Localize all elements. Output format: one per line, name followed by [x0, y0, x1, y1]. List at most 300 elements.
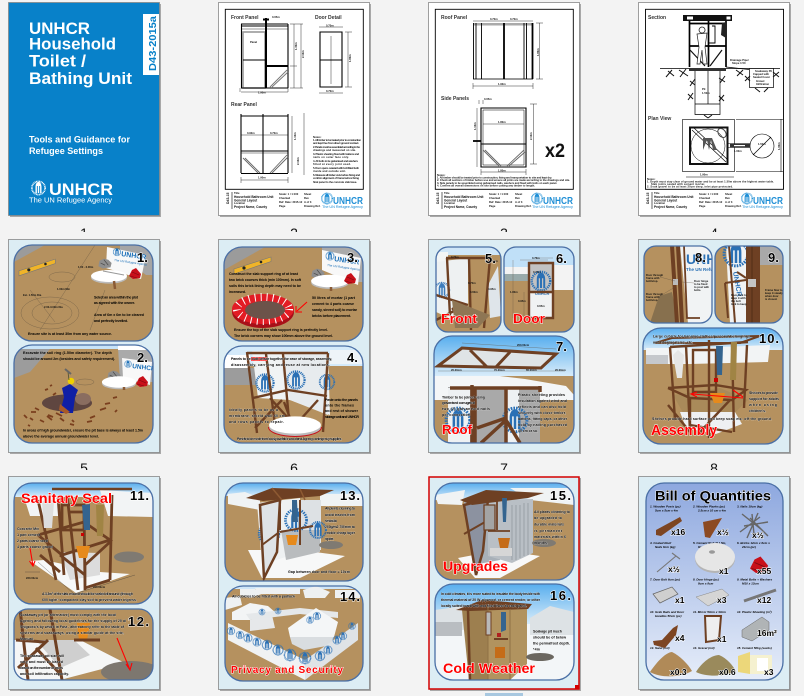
title block: Sheet: [304, 192, 311, 196]
drawing notes: 3. Plastic sheeting fixed with battens and: [313, 152, 359, 156]
icon: gravel pile: [696, 655, 736, 676]
quantities: x½: [717, 527, 729, 537]
panel: step 8 hinge: [643, 245, 713, 324]
panel: step 8 hinge: to be fixed: [694, 282, 708, 286]
title block: Drawing Ref.: [725, 204, 742, 208]
panel: step 8 hinge: frame with: [646, 276, 660, 280]
small UNHCR logo: [742, 193, 784, 209]
panel: step 11 sanitary seal: 600 kg/m³ compacted clay soil to prevent water ingress.: [42, 598, 137, 602]
step number: 4.: [347, 350, 358, 365]
drawing notes: fitted at every joint used.: [313, 162, 351, 166]
panel: step 4 wall panels: Paste onto the panels: [325, 398, 358, 402]
title block: Location: [654, 201, 666, 205]
page 2: front, door and rear panel drawings: [218, 2, 371, 217]
drawing notes: drawings and measured on site.: [313, 148, 356, 152]
panel: step 7 roof: reflects and can also hold: [518, 405, 566, 409]
panel: step 8 hinge: bolts.: [694, 288, 701, 292]
quantities: x0.3: [670, 667, 687, 677]
drawing: section: Soakaway Pit: [755, 69, 772, 73]
item labels: Handles 50cm (pc): [655, 614, 682, 618]
panel: step 6 door: 1.80m: [510, 290, 518, 294]
drawing: roof panel: 0.70m: [490, 17, 498, 21]
panel: step 3 slab support ring: [224, 247, 363, 341]
drawing: rear panel: 1.90m: [258, 176, 266, 180]
quantities: x1: [675, 595, 685, 605]
document code tab: [143, 14, 159, 75]
title block: Rev: [304, 196, 309, 200]
page number 5: 5: [80, 460, 88, 476]
cover title: Household: [29, 36, 116, 54]
item labels: 7. Door Bolt 6cm (pc): [650, 578, 680, 582]
drawing: rear panel: Rear Panel: [231, 102, 257, 108]
title block: Project Name, County: [444, 205, 477, 209]
step number: 16.: [550, 588, 571, 603]
panel: step 9 door bolt: [715, 242, 783, 323]
UNHCR logo: UNHCR: [49, 180, 113, 199]
panel: step 5 front frame: 1.90m: [490, 259, 498, 263]
panel: step 13 plastic sheeting: enable cheap layer: [325, 531, 356, 535]
panel: step 11 sanitary seal: 1 part cement: [17, 533, 41, 537]
item labels: [649, 504, 773, 650]
panel: step 3 slab support ring: 50 litres of mortar (1 part: [312, 296, 356, 300]
label: front: Front: [441, 311, 478, 326]
panel: step 12 soak pit: Agency and following local guidelines for the supply of 20 al: [20, 619, 126, 623]
small UNHCR logo: The UN Refugee Agency: [532, 204, 573, 209]
drawing: side panels: 0.05m: [484, 97, 492, 101]
panel: step 8 hinge: to post with: [694, 285, 709, 289]
panel: step 4 wall panels: membrane, shield wall 60 cm: [229, 414, 285, 418]
drawing notes: [313, 135, 361, 184]
title block: Checked: [699, 196, 711, 200]
step number: 5.: [485, 251, 496, 266]
panel: step 11 sanitary seal: [14, 483, 153, 604]
title block: Rev: [725, 196, 730, 200]
drawing: section: Section: [648, 15, 666, 21]
panel: step 9 door bolt: when door: [764, 294, 779, 298]
panel: step 4 wall panels: storage unit and UNHCR: [325, 415, 359, 419]
quantities: x1: [719, 566, 729, 576]
panel: step 5 front frame: [435, 247, 501, 332]
panel: step 11 sanitary seal: A 3-3m² of the slab, mound should be sealed all around, (through: [42, 592, 133, 596]
icon: sand pile: [650, 652, 692, 676]
small UNHCR logo: UNHCR: [753, 196, 784, 207]
panel: step 7 roof: hold by nailing purchased: [518, 423, 567, 427]
small UNHCR logo: UNHCR: [333, 196, 364, 207]
UNHCR logo: The UN Refugee Agency: [29, 196, 112, 204]
panel: step 1 site selection: and perfectly levelled.: [94, 319, 128, 323]
page 8: steps 8, 9 and 10: [638, 240, 791, 454]
panel: step 5 front frame: 0.70m: [451, 255, 459, 259]
title block: Ref: Date: 2015-12: [489, 200, 513, 204]
panel: step 11 sanitary seal: 220.00cm: [93, 585, 106, 589]
panel: step 2 excavation: should be around 2m (besides and safety requirement).: [23, 357, 115, 361]
drawing notes: Notes:: [647, 177, 655, 181]
panel: step 7 roof: insulation against wind and: [518, 399, 567, 403]
drawing: door detail: 0.70m: [326, 24, 334, 28]
drawing: door detail: 0.70m: [326, 89, 334, 93]
page 10: steps 13 and 14: [218, 476, 371, 691]
drawing: rear panel: 1.10m: [293, 132, 297, 140]
panel: step 3 slab support ring: The brick corners may show 100mm above the ground level.: [234, 334, 333, 338]
icon: cement bags: [738, 652, 772, 674]
panel: step 13 plastic sheeting: 200g/m2 750mm to: [325, 525, 356, 529]
drawing: section: Capped with: [753, 72, 769, 76]
panel: step 9 door bolt: lock to keep: [731, 302, 747, 306]
panel: step 13 plastic sheeting: [225, 483, 363, 581]
panel: step 15 upgrades: be upgraded to: [534, 516, 563, 520]
panel: step 1 site selection: The UN Refugee Agency: [114, 258, 148, 267]
drawing: rear panel: 0.90m: [247, 131, 255, 135]
drawing notes: confirm alignment of frame before fixing: [313, 176, 359, 180]
page number 6: 6: [290, 460, 298, 476]
title block: Household Bathroom Unit: [444, 195, 484, 199]
panel: step 6 door: 0.95m: [518, 299, 526, 303]
page number 4: 4: [710, 225, 718, 241]
panel: step 1 site selection: Area of 6m x 6m to be cleared: [94, 313, 144, 317]
drawing: roof panel: 0.70m: [510, 17, 518, 21]
title block: Rev: [515, 196, 520, 200]
panel: step 10 assembly: Shelves provide hard surface and keep soap etc. off the ground.: [652, 417, 772, 421]
title block: Checked: [279, 196, 291, 200]
title block: Scale: 1 / 1:100: [279, 192, 299, 196]
panel: step 13 plastic sheeting: avoid insects from: [325, 513, 355, 517]
small UNHCR logo: [322, 193, 364, 209]
panel: step 12 soak pit: systems and soakaways, using a similar guide at the site.: [20, 631, 124, 635]
document code tab: D43-2015a: [147, 16, 159, 71]
panel: step 3 slab support ring: UNHCR: [334, 256, 360, 266]
panel: step 4 wall panels: [224, 346, 363, 443]
drawing notes: Notes:: [437, 173, 445, 177]
panel: step 2 excavation: [14, 345, 156, 443]
panel: step 7 roof: battens, fitting caps, or other: [518, 417, 568, 421]
panel: step 7 roof: 20.00cm: [451, 368, 462, 372]
step number: 6.: [556, 251, 567, 266]
drawing notes: 2. Panels must be assembled according to the: [313, 145, 360, 149]
icon: grab rail: [653, 625, 678, 648]
drawing notes: 2. Check all sections of timber before use and ensure all joints are made according to the drawings and site.: [437, 178, 570, 182]
small UNHCR logo: The UN Refugee Agency: [742, 204, 783, 209]
panel: step 10 assembly: children's.: [749, 409, 766, 413]
panel: step 12 soak pit: based on the number of users: [20, 666, 63, 670]
drawing: door detail: [315, 15, 352, 93]
item labels: 5cm x 5cm x 4m: [655, 508, 678, 512]
drawing: front panel: 0.05m: [272, 15, 280, 19]
panel: step 1 site selection: 1.50 - 2.00m: [78, 265, 94, 269]
small UNHCR logo: The UN Refugee Agency: [322, 204, 363, 209]
icon: metal bolt: [744, 590, 776, 601]
panel: step 2 excavation: above the average annual groundwater level.: [23, 434, 99, 438]
quantity label x2: x2: [545, 141, 565, 162]
item labels: 4. Coated Roof: [649, 541, 672, 545]
page 4: section and plan drawings: [638, 2, 791, 217]
step number: 10.: [759, 331, 779, 346]
icon: roof nail: [657, 553, 680, 572]
drawing: front panel: 1.30m: [294, 42, 298, 50]
panel: step 1 site selection: 1.00m Min: [57, 287, 70, 291]
page 11: steps 15 and 16 (selected page): [429, 477, 581, 691]
panel: step 10 assembly: [643, 328, 783, 444]
panel: step 8 hinge: bolt/stop.: [646, 298, 658, 302]
drawing: roof panel: Roof Panel: [441, 15, 468, 21]
panel: step 3 slab support ring: sandy, sieved soil) to mortar: [312, 308, 358, 312]
step number: 9.: [768, 250, 779, 265]
panel: step 7 roof: [434, 336, 574, 443]
drawing: side panels: [441, 96, 537, 175]
panel: step 13 plastic sheeting: All plants cleaning to: [325, 506, 356, 510]
panel: step 1 site selection: 2.00-3.00m Dia: [44, 305, 63, 309]
label: roof: Roof: [442, 422, 473, 437]
panel: step 5 front frame: 0.95m: [488, 287, 496, 291]
panel: step 7 roof: securely with close timber,: [518, 411, 566, 415]
panel: step 8 hinge: Door hinge: [694, 279, 709, 283]
panel: step 16 cold weather: the permafrost depth.: [533, 642, 570, 646]
panel: step 16 cold weather: thermal material of 20 W, plywood, or cement render, or other: [441, 598, 541, 602]
panel: step 6 door: UNHCR: [535, 291, 550, 296]
panel: bill of quantities: [646, 483, 783, 680]
step number: 7.: [556, 339, 567, 354]
drawing: door detail: Door Detail: [315, 15, 342, 21]
panel: step 7 roof: per connection: [442, 413, 470, 417]
cover title: [29, 20, 133, 88]
title block: Ref: Date: 2015-12: [699, 200, 723, 204]
panel: step 13 plastic sheeting: repairs.: [325, 537, 334, 541]
quantities: x4: [675, 633, 685, 643]
drawing notes: Slab joints sealed with cement mortar.: [651, 182, 705, 186]
panel: step 9 door bolt: is closed.: [765, 297, 778, 301]
drawing: section: Slope 1:50: [732, 61, 746, 65]
panel: step 9 door bolt: Door lock to: [731, 293, 747, 297]
drawing: plan view: [648, 116, 783, 177]
panel: step 11 sanitary seal: 4 parts coarse gravel: [17, 545, 53, 549]
panel: step 8 hinge: UNHC: [686, 251, 726, 267]
quantities: x16: [671, 527, 685, 537]
page number 7: 7: [500, 460, 508, 476]
title block: General Layout: [444, 198, 468, 202]
drawing notes: 1. Depth must stay clear of ground water and be at least 1.50m above the highest water table.: [647, 180, 774, 184]
panel: step 16 cold weather: locally suited board with and fixed these to each panel.: [441, 604, 527, 608]
panel: step 5 front frame: 0.60m: [470, 290, 478, 294]
panel: step 2 excavation: UNHCR: [132, 363, 156, 373]
icon: mirror: [705, 616, 721, 642]
panel: step 1 site selection: Est. 1.50m Dia: [23, 293, 42, 297]
title block: Page: [489, 204, 496, 208]
panel: step 3 slab support ring: Ensure the top of the slab support ring is perfectly level.: [234, 328, 328, 332]
panel: step 7 roof: two (2) galvanised nails: [442, 407, 490, 411]
item labels: 6. Bricks 12cm x 6cm x: [737, 541, 770, 545]
panel: step 12 soak pit: Manual.: [20, 637, 34, 641]
title block: D43-15: [226, 192, 230, 204]
panel: step 3 slab support ring: two brick courses thick (min 100mm). In soft: [229, 278, 302, 282]
drawing: side panels: Side Panels: [441, 96, 469, 102]
panel: step 4 wall panels: onto the frames: [325, 404, 354, 408]
title block: [226, 191, 321, 209]
drawing: rear panel: 2.10m: [296, 157, 300, 165]
panel: step 6 door: [504, 247, 574, 332]
drawing: roof panel: 1.90m: [498, 82, 506, 86]
item labels: 2.5cm x 10 cm x 4m: [697, 508, 726, 512]
drawing: front panel: 1.90m: [258, 90, 266, 94]
page 9: steps 11 and 12: [8, 476, 161, 691]
quantities: x½: [668, 564, 680, 574]
icon: nails: [740, 513, 768, 538]
panel: step 16 cold weather: *4m: [533, 648, 540, 652]
panel: step 8 hinge: frame with: [646, 295, 660, 299]
drawing: section: [648, 15, 780, 118]
panel: step 7 roof: galvanised corrugated: [442, 401, 475, 405]
quantities: x½: [752, 530, 764, 540]
cover title: Bathing Unit: [29, 70, 133, 88]
title block: Project Name, County: [234, 205, 267, 209]
title block: [646, 191, 742, 209]
drawing: front panel: Front Panel: [231, 15, 259, 21]
cover subtitle: Refugee Settings: [29, 146, 103, 156]
item labels: 15. Cement 50kg (sacks): [737, 646, 772, 650]
cover subtitle: [29, 134, 131, 156]
label: door: Door: [513, 311, 545, 326]
drawing notes: final panel to the concrete slab base.: [313, 180, 357, 184]
quantities: x55: [757, 566, 771, 576]
item labels: 9. Metal Bolts + Washers: [737, 578, 773, 582]
drawing notes: 5. Door opens outward with bolt fitted both: [313, 166, 359, 170]
drawing notes: and kept free from direct ground contact.: [313, 141, 359, 145]
drawing notes: 2. Soak gravel to be at least 20cm deep, inlet pipe protected.: [647, 184, 733, 188]
panel: step 4 wall panels: Panels to be made from locally-available wood and Agency contingency supplies.: [237, 437, 342, 441]
page 3: roof and side panel drawings: [428, 2, 581, 217]
panel: step 15 upgrades: durable materials: [534, 522, 564, 526]
step number: 3.: [347, 250, 358, 265]
quantities: 16m²: [757, 628, 777, 638]
label: privacy and security: Privacy and Security: [231, 665, 343, 676]
panel: step 10 assembly: and hanging items, etc.: [653, 340, 693, 344]
panel: step 3 slab support ring: soils this brick lining depth may need to be: [229, 284, 301, 288]
step number: 8.: [695, 250, 706, 265]
panel: step 16 cold weather: Soakage pit much: [533, 630, 562, 634]
panel: step 16 cold weather: should be of below: [533, 636, 566, 640]
drawing notes: 4. All bolts to be galvanised and washers: [313, 159, 358, 163]
panel: step 10 assembly: when using: [748, 403, 777, 407]
panel: step 7 roof: 65.00cm: [526, 368, 537, 372]
panel: step 10 assembly: Shelves to provide: [749, 391, 778, 395]
panel: step 13 plastic sheeting: standard 1 to: [325, 519, 338, 523]
panel: step 9 door bolt: keep it steady: [765, 291, 783, 295]
panel: step 9 door bolt: keep it with: [731, 296, 746, 300]
page number 2: 2: [290, 225, 298, 241]
title block: Location: [234, 201, 246, 205]
icon: wooden post: [656, 517, 682, 536]
title block: Scale: 1 / 1:100: [699, 192, 719, 196]
step number: 12.: [128, 614, 149, 629]
title block: A of 3: [304, 200, 312, 204]
title block: General Layout: [654, 198, 678, 202]
drawing: front panel: Panel: [250, 40, 257, 44]
page number 8: 8: [710, 460, 718, 476]
quantities: x1: [717, 634, 727, 644]
panel: step 7 roof: 30 cm or so.: [518, 429, 538, 433]
drawing: plan view: 1.00m: [734, 149, 742, 153]
panel: step 3 slab support ring: Construct the slab support ring of at least: [229, 272, 299, 276]
drawing: section: Pit: [702, 87, 706, 91]
page 12: bill of quantities: [638, 476, 791, 691]
UNHCR logo: [29, 180, 113, 204]
item labels: 10. Grab Rails and Door: [650, 610, 685, 614]
icon: wooden plank: [703, 518, 722, 538]
title block: Household Bathroom Unit: [654, 195, 694, 199]
drawing: roof panel: [441, 15, 543, 89]
icon: door hinge: [696, 589, 729, 606]
drawing notes: [647, 177, 774, 188]
label: upgrades: Upgrades: [443, 558, 508, 574]
title block: [436, 191, 532, 209]
title block: Sheet: [725, 192, 732, 196]
item labels: 8. Door Hinge (pc): [693, 578, 719, 582]
panel: step 3 slab support ring: The UN Refugee Agency: [327, 263, 361, 272]
label: cold weather: Cold Weather: [443, 660, 536, 676]
drawing notes: 1. All timber to be treated prior to construction: [313, 138, 361, 142]
step number: 1.: [137, 250, 148, 265]
panel: step 1 site selection: as agreed with the owner.: [94, 301, 135, 305]
page 5: steps 1 and 2: [8, 240, 161, 454]
title block: Title: [234, 191, 240, 195]
item labels: 3. Nails 10cm (kg): [737, 504, 762, 508]
drawing: section: Gravel: [756, 79, 765, 83]
panel: step 4 wall panels: disassembly, carrying and reuse at new locations.: [231, 363, 330, 367]
drawing: roof panel: 1.80m: [536, 48, 540, 56]
drawing: section: Drainage Pipe/: [730, 58, 749, 62]
cover title: Toilet /: [29, 52, 86, 70]
quantities: x3: [717, 595, 727, 605]
title block: A of 3: [725, 200, 733, 204]
drawing: front panel: 2.10m: [301, 50, 305, 58]
panel: step 15 upgrades: All plants cleaning to: [534, 510, 571, 514]
scrollbar thumb: [485, 693, 523, 696]
step number: 13.: [340, 488, 360, 503]
panel: step 6 door: 0.70m: [532, 256, 540, 260]
title block: Page: [699, 204, 706, 208]
drawing notes: 3. Side panels to be assembled using galvanised nails, washers and fixed with bolts on each panel.: [437, 181, 557, 185]
panel: step 7 roof: Timber to be joined using: [442, 396, 485, 400]
item labels: 13. Sand (m3): [650, 646, 670, 650]
panel: step 2 excavation: In areas of high groundwater, ensure the pit base is always at least 1.5m: [23, 428, 143, 432]
panel: step 16 cold weather: [435, 584, 574, 680]
title block: Scale: 1 / 1:100: [489, 192, 509, 196]
drawing: section: Sealed Cover: [753, 75, 770, 79]
title block: Household Bathroom Unit: [234, 195, 274, 199]
panel: step 7 roof: Plastic sheeting provides: [518, 393, 565, 397]
drawing: rear panel: 0.70m: [270, 131, 278, 135]
title block: Project Name, County: [654, 205, 687, 209]
panel: step 4 wall panels: and rows panels to repair.: [229, 420, 284, 424]
panel: step 7 roof: 200.00cm: [517, 343, 530, 347]
title block: General Layout: [234, 198, 258, 202]
panel: step 10 assembly: support for adults: [749, 397, 779, 401]
panel: step 9 door bolt: the bolt: [731, 299, 741, 303]
panel: step 13 plastic sheeting: Gap between door and floor = 10cm: [288, 570, 350, 574]
panel: step 4 wall panels: Panels to be built offsite together for ease of storage, assembly,: [231, 357, 332, 361]
drawing: plan view: 1.50m: [758, 142, 766, 146]
page 7: steps 5, 6 and 7: [428, 240, 581, 454]
panel: step 1 site selection: Ensure site is at least 30m from any water source.: [28, 332, 112, 336]
drawing notes: nails on outer face only.: [313, 155, 349, 159]
panel: step 8 hinge: The UN Refugee Agency: [686, 267, 739, 272]
item labels: 24cm (pc): [741, 545, 756, 549]
step number: 11.: [130, 488, 149, 503]
drawing: front panel: [231, 15, 305, 94]
drawing: section: 1.50m: [702, 91, 710, 95]
panel: step 15 upgrades: is permanent: [534, 529, 563, 533]
title block: D43-15: [436, 192, 440, 204]
panel: step 14 privacy and security: [225, 586, 363, 681]
panel: step 3 slab support ring: cement to 4 parts coarse: [312, 302, 354, 306]
